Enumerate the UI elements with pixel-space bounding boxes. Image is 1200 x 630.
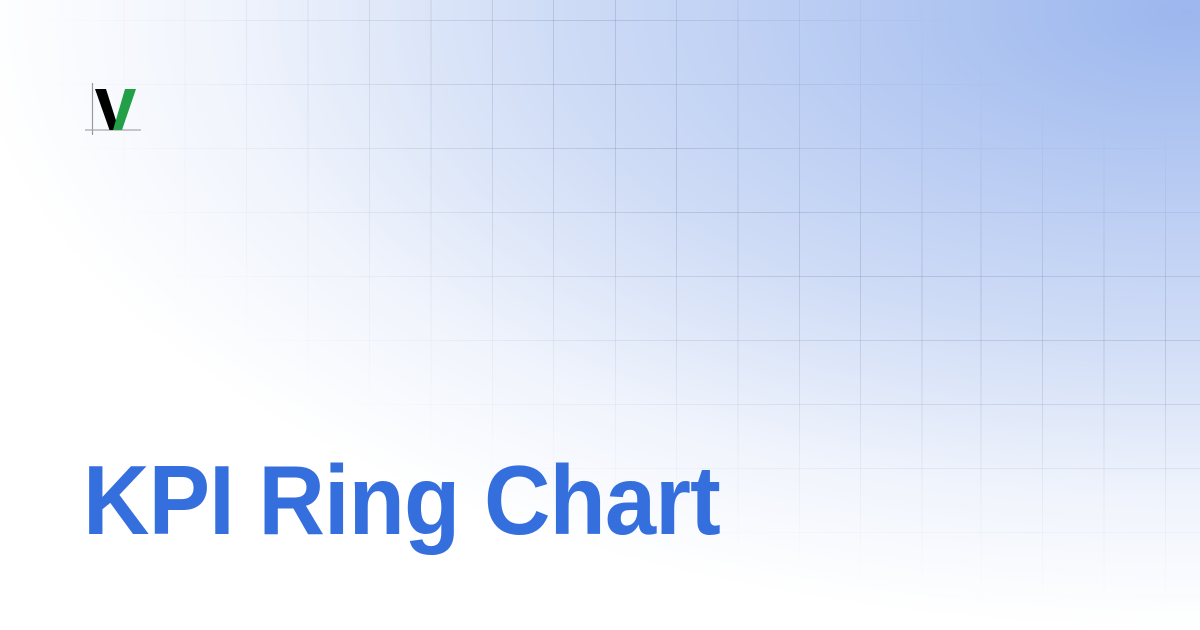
title: KPI Ring Chart — [83, 445, 720, 555]
icon: V logo on axes — [85, 83, 141, 135]
